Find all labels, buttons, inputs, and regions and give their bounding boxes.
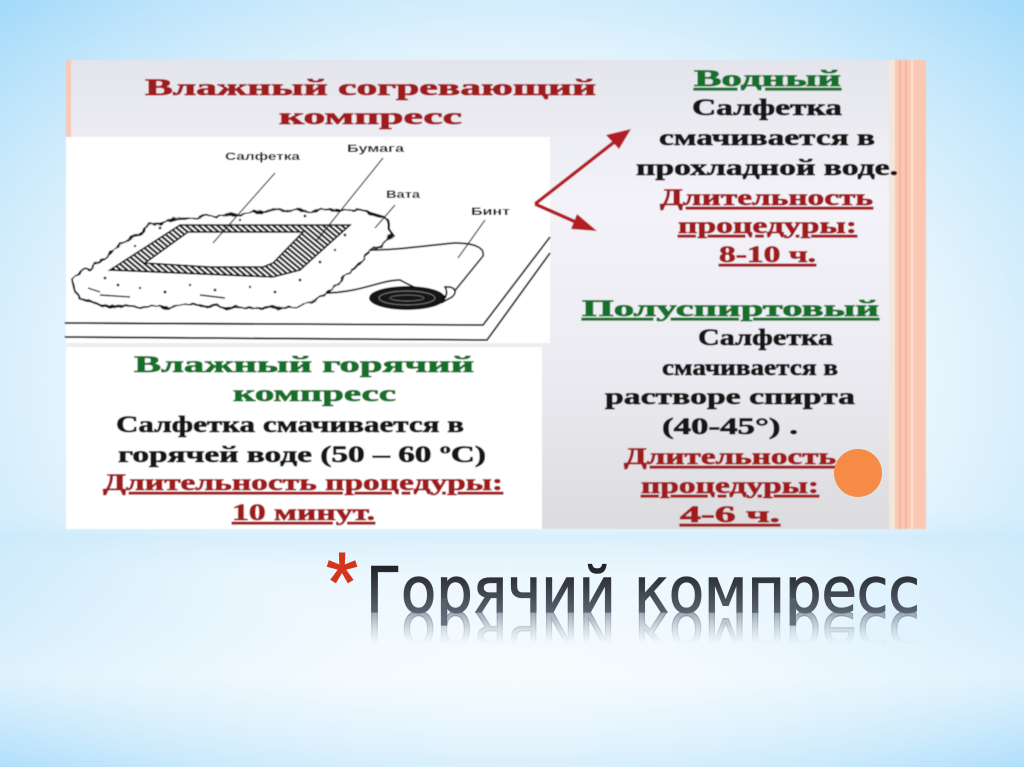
diagram labels: Вата [386,189,421,201]
diagram labels [225,143,511,218]
diagram labels: Бинт [471,206,511,218]
panel: moist hot compress: Салфетка смачивается в [116,412,464,437]
text block: semi-alcohol compress: смачивается в [662,355,838,380]
arrow: up to water compress [535,129,631,204]
decorative stripe column [889,60,926,529]
cotton wool speckles [88,215,346,298]
title: Горячий компресс [366,554,920,627]
text block: semi-alcohol compress: растворе спирта [605,384,856,409]
bandage [323,243,483,309]
arrow: down to semi-alcohol compress [535,204,597,231]
diagram: compress layers [65,137,550,343]
text block: water compress: 8-10 ч. [719,242,816,267]
title reflection: Горячий компресс [366,597,920,670]
panel background [66,60,926,529]
text block: water compress: смачивается в [659,125,875,150]
orange dot [834,449,882,497]
title bullet asterisk: * [326,535,358,629]
diagram labels: Бумага [347,143,405,155]
panel: compress picture [65,60,926,529]
text block: semi-alcohol compress [582,296,879,527]
text block: water compress: прохладной воде. [636,155,898,180]
panel: moist hot compress: Длительность процедуры: [103,470,503,495]
text block: semi-alcohol compress: процедуры: [641,473,819,498]
panel: moist hot compress: Влажный горячий [134,352,474,377]
text block: semi-alcohol compress: (40-45°) . [662,414,798,439]
text block: water compress: Длительность [660,185,873,210]
text block: water compress: Салфетка [692,95,843,120]
cotton wool [70,209,392,308]
text block: water compress [636,66,898,267]
table surface [65,237,550,340]
panel: moist hot compress: горячей воде (50 – 60 ºС) [118,442,486,467]
oilcloth paper hatching [110,225,350,277]
text block: semi-alcohol compress: 4-6 ч. [680,502,780,527]
leader lines [213,158,485,258]
panel: moist hot compress: 10 минут. [232,500,375,525]
panel: moist hot compress [66,347,542,529]
text block: semi-alcohol compress: Салфетка [698,325,834,350]
left edge stripe [66,60,71,137]
heading: moist warming compress: Влажный согревающий [145,75,596,100]
heading: moist warming compress [145,75,596,129]
text block: semi-alcohol compress: Полуспиртовый [582,296,879,321]
diagram labels: Салфетка [225,151,301,163]
text block: water compress: процедуры: [678,213,857,238]
text block: water compress: Водный [694,66,841,91]
heading: moist warming compress: компресс [279,104,462,129]
panel: moist hot compress: компресс [233,381,396,406]
text block: semi-alcohol compress: Длительность [624,444,836,469]
